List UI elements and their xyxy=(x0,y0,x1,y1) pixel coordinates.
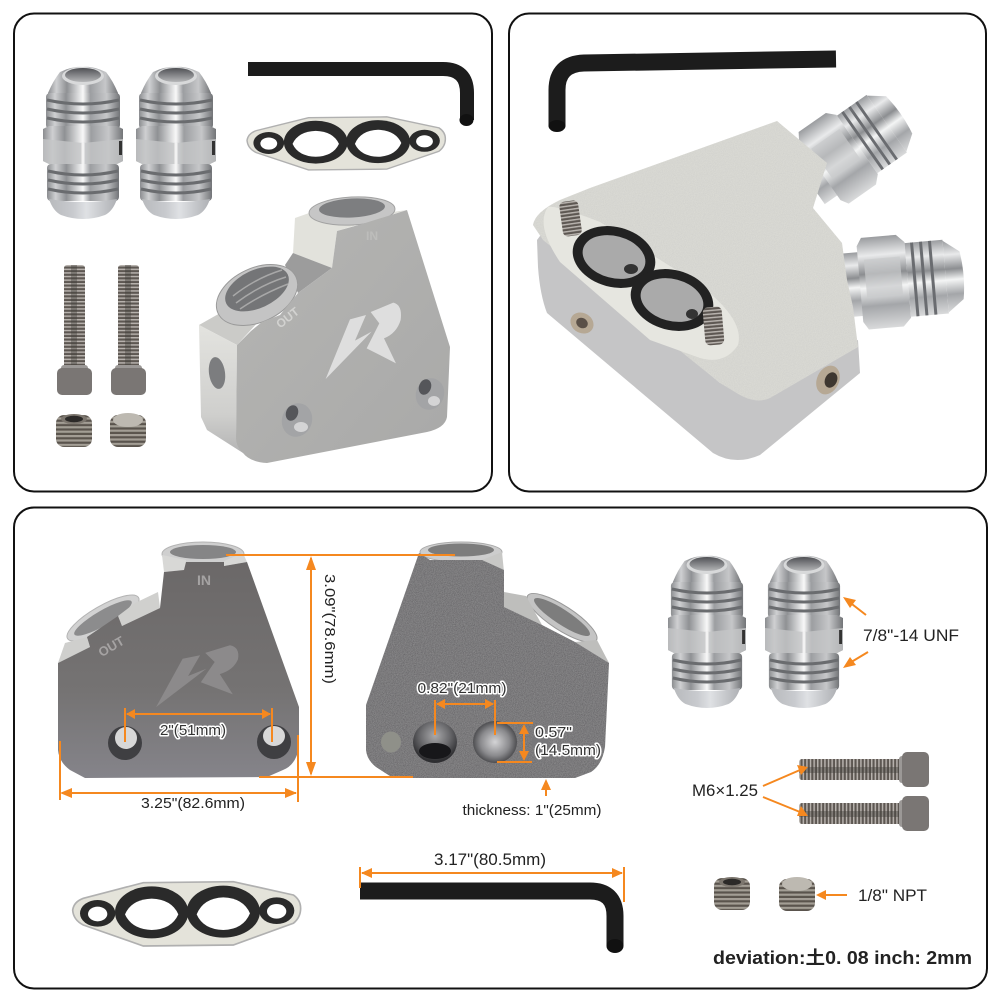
dimension: block height: 3.09"(78.6mm) xyxy=(321,574,338,684)
label: IN: IN xyxy=(197,572,211,588)
label: OUT: OUT xyxy=(273,304,302,331)
plug with solid cap xyxy=(779,877,815,911)
dimension: block width: 3.25"(82.6mm) xyxy=(141,795,245,812)
bolt two xyxy=(111,265,146,395)
dimension: block width xyxy=(60,735,298,812)
dimension: port diameter xyxy=(497,723,601,762)
adapter block, front view xyxy=(199,195,450,463)
adapter block, rear view xyxy=(533,121,860,460)
label: OUT: OUT xyxy=(96,633,127,660)
dimension: port diameter: (14.5mm) xyxy=(535,742,601,759)
dimension: port spacing: 0.82"(21mm) xyxy=(418,680,507,697)
fitting: left AN adapter xyxy=(668,556,746,708)
callout: 7/8 thread xyxy=(843,597,959,668)
dimension: block height xyxy=(226,555,455,777)
dimension: thickness: thickness: 1"(25mm) xyxy=(462,802,602,819)
callout: 7/8 thread: 7/8"-14 UNF xyxy=(863,626,959,645)
callout: M6 bolts xyxy=(692,765,808,816)
callout: NPT plug xyxy=(816,886,927,905)
gasket on block xyxy=(544,200,739,360)
dimension: allen key length: 3.17"(80.5mm) xyxy=(434,850,546,869)
plug with hex socket xyxy=(56,414,92,447)
logo: LR xyxy=(326,303,401,379)
fitting: right AN adapter xyxy=(765,556,843,708)
allen key xyxy=(248,69,474,126)
plug with hex socket xyxy=(714,877,750,910)
dimension: bolt spacing: 2"(51mm) xyxy=(160,722,226,739)
allen key xyxy=(360,891,624,953)
upper fitting xyxy=(782,78,926,215)
gasket xyxy=(73,882,301,946)
panel: dimensions xyxy=(14,508,987,988)
dimension: thickness xyxy=(462,779,602,819)
fitting: left AN adapter xyxy=(43,66,123,219)
plug with solid cap xyxy=(110,413,146,447)
block front with dimensions xyxy=(58,542,299,778)
lower fitting xyxy=(840,229,968,331)
panel: installed assembly xyxy=(509,14,986,492)
dimension: port diameter: 0.57" xyxy=(535,724,572,741)
bolt two xyxy=(799,796,929,831)
gasket xyxy=(247,117,445,170)
bolt one xyxy=(57,265,92,395)
note: deviation: deviation:土0. 08 inch: 2mm xyxy=(713,948,972,968)
logo: LR xyxy=(156,645,238,707)
block rear with dimensions xyxy=(366,542,609,778)
callout: M6 bolts: M6×1.25 xyxy=(692,781,758,800)
panel: kit contents xyxy=(14,14,492,492)
dimension: allen key length xyxy=(360,850,624,902)
dimension: port spacing xyxy=(418,680,507,735)
fitting: right AN adapter xyxy=(136,66,216,219)
dimension: bolt spacing xyxy=(125,708,272,742)
callout: NPT plug: 1/8" NPT xyxy=(858,886,927,905)
label: IN: IN xyxy=(366,229,378,243)
bolt one xyxy=(799,752,929,787)
allen key xyxy=(548,59,836,132)
